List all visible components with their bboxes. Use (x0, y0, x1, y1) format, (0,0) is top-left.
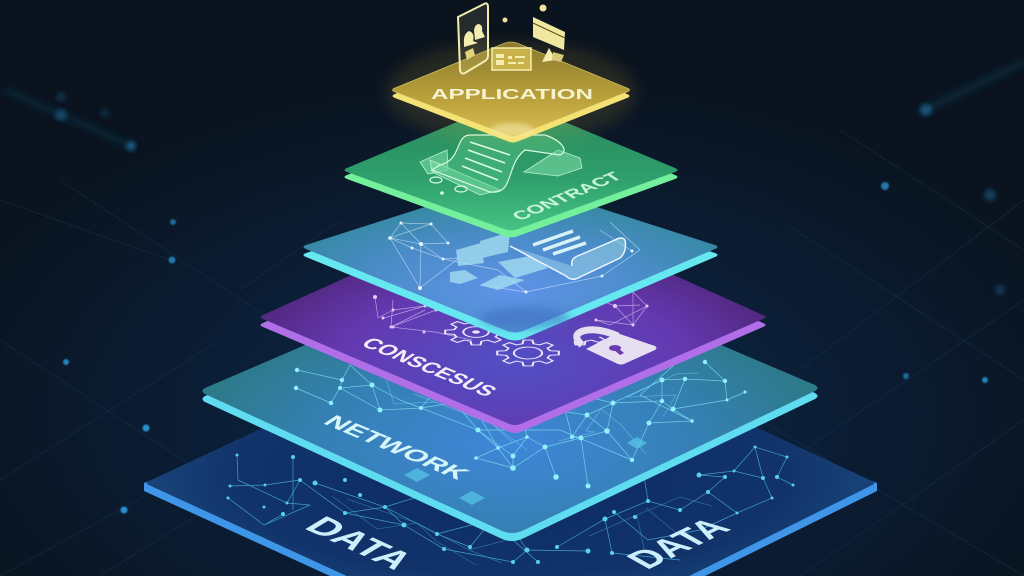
label: CONTRACT: CONTRACT (508, 170, 627, 224)
data nodes (226, 446, 794, 564)
icon: contract envelopes (420, 150, 582, 195)
blue mesh nodes (388, 222, 634, 294)
blue mesh (390, 222, 640, 292)
layer: application (386, 3, 636, 142)
background grid (0, 130, 1024, 576)
background glowing dots (55, 92, 1005, 514)
label: CONSCESUS: CONSCESUS (356, 335, 501, 400)
icon: boxes (450, 232, 548, 290)
icon: app window (533, 17, 565, 50)
icon: contract scroll (430, 135, 564, 192)
floating dots (502, 4, 546, 22)
plate tip glow (490, 123, 534, 137)
layer: consensus (260, 204, 766, 433)
icon: ledger scroll (510, 231, 625, 279)
network mesh: data (228, 447, 793, 565)
ripple glow (480, 307, 570, 329)
network nodes (294, 360, 746, 488)
label: DATA right: DATA (617, 512, 739, 574)
data plate edges (144, 481, 877, 576)
icon: shapes (542, 48, 564, 62)
label: NETWORK: NETWORK (317, 412, 475, 483)
label: APPLICATION: APPLICATION (431, 86, 593, 103)
icon: dashboard (492, 48, 531, 70)
data squares (404, 437, 647, 505)
layer: blue ledger (304, 180, 718, 340)
layer: contract (344, 100, 678, 238)
consensus nodes (373, 295, 648, 334)
layer: data (144, 314, 877, 576)
label: DATA left: DATA (296, 512, 422, 575)
background streaks (5, 62, 1024, 146)
consensus mesh (375, 292, 647, 340)
icon: phone (458, 3, 488, 74)
layer: network (202, 258, 818, 541)
icon: padlock (577, 330, 656, 364)
network mesh (296, 360, 745, 486)
icon: gears (432, 314, 606, 371)
